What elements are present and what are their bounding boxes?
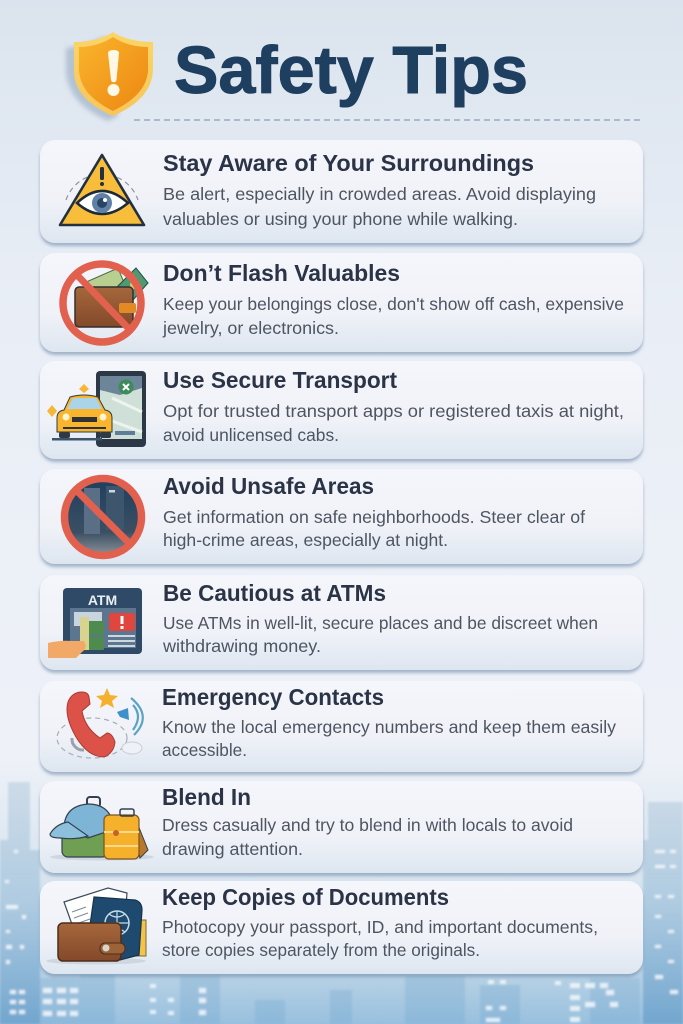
description: [163, 507, 585, 550]
description: withdrawing money.: [162, 636, 321, 656]
heading: Blend In: [162, 784, 251, 810]
description: Be alert, especially in crowded areas. Avoid displaying: [163, 184, 596, 204]
description: high-crime areas, especially at night.: [163, 530, 448, 550]
icon: backpacks and cap: [50, 797, 154, 860]
description: [162, 613, 598, 656]
description: valuables or using your phone while walking.: [163, 209, 518, 229]
panel: Be Cautious at ATMs: [40, 575, 643, 670]
description: Photocopy your passport, ID, and important documents,: [162, 917, 598, 937]
description: avoid unlicensed cabs.: [163, 425, 339, 445]
panel: Use Secure Transport: [40, 361, 643, 459]
description: Dress casually and try to blend in with locals to avoid: [162, 815, 573, 835]
background skyline: [0, 782, 683, 1024]
description: Know the local emergency numbers and keep them easily: [162, 717, 616, 737]
icon: ATM machine with hand: [48, 588, 142, 658]
description: [162, 717, 616, 760]
panel: Emergency Contacts: [40, 681, 643, 772]
panel: Stay Aware of Your Surroundings: [40, 140, 643, 243]
heading: Stay Aware of Your Surroundings: [163, 150, 534, 176]
heading: Avoid Unsafe Areas: [163, 473, 374, 499]
title: Safety Tips: [174, 33, 528, 108]
icon: ATM machine with hand: ATM: [88, 592, 117, 608]
panel: Avoid Unsafe Areas: [40, 469, 643, 564]
icon: taxi and map tablet: [47, 371, 146, 447]
icon: phone, star and signal waves: [57, 688, 143, 758]
description: drawing attention.: [162, 839, 303, 859]
heading: Be Cautious at ATMs: [163, 580, 386, 606]
icon: wallet with prohibition sign: [63, 264, 148, 342]
panel: Blend In: [40, 781, 643, 873]
heading: Emergency Contacts: [162, 684, 384, 710]
heading: Don’t Flash Valuables: [163, 260, 400, 286]
description: [163, 184, 596, 229]
description: Use ATMs in well-lit, secure places and be discreet when: [163, 613, 598, 633]
description: Opt for trusted transport apps or registered taxis at night,: [163, 401, 624, 421]
icon: wallet, passport and documents: [46, 888, 146, 964]
description: [162, 917, 598, 960]
description: accessible.: [162, 740, 247, 760]
description: [163, 401, 624, 445]
description: jewelry, or electronics.: [162, 318, 339, 338]
icon: eye warning triangle: [60, 155, 144, 225]
description: [162, 294, 624, 338]
panel: Don't Flash Valuables: [40, 253, 643, 352]
description: Keep your belongings close, don't show off cash, expensive: [163, 294, 624, 314]
panel: Keep Copies of Documents: [40, 881, 643, 974]
heading: Keep Copies of Documents: [162, 884, 449, 910]
description: Get information on safe neighborhoods. Steer clear of: [163, 507, 585, 527]
header icon: warning shield: [66, 32, 153, 121]
icon: dark alley with prohibition sign: [64, 478, 142, 556]
description: store copies separately from the originals.: [162, 940, 480, 960]
heading: Use Secure Transport: [163, 367, 397, 393]
description: [162, 815, 573, 859]
